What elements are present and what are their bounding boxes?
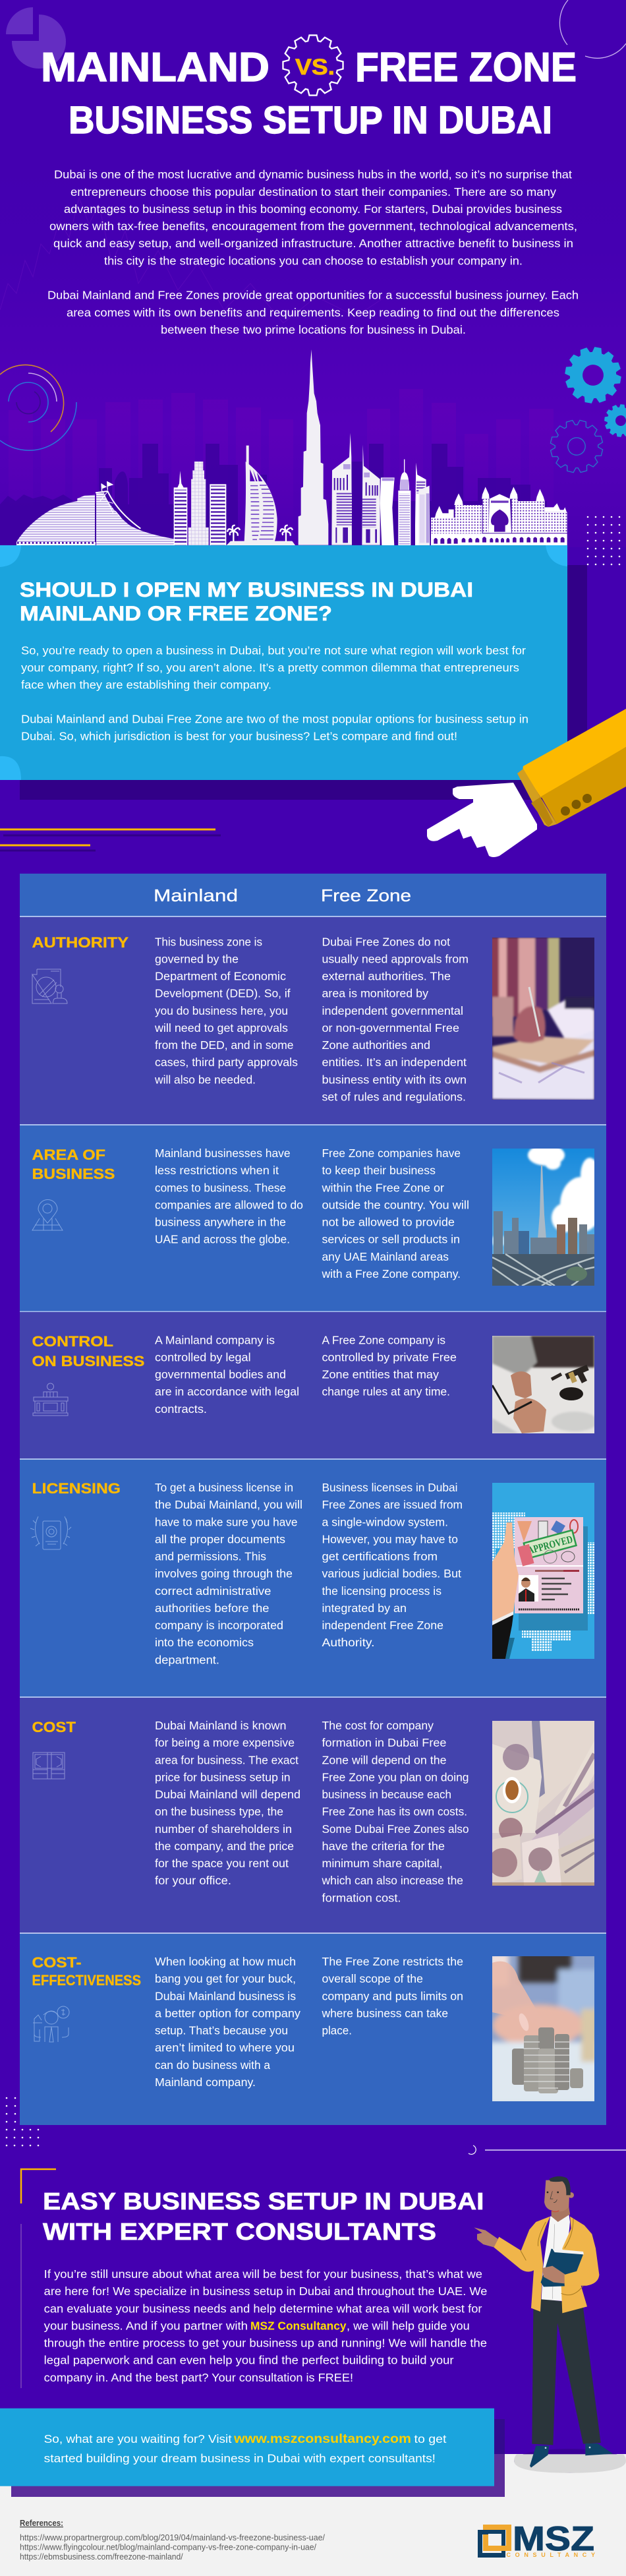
mainland text: Development (DED). So, if [155,987,291,1000]
text block: consultants: your business. And if you partner with [44,2320,248,2333]
free zone text: where business can take [321,2006,448,2020]
free zone text: Free Zone companies have [322,1147,461,1160]
illustration: pointing hand with yellow sleeve [427,709,626,857]
logo: MSZ Consultancy [478,2520,595,2558]
free zone text: not be allowed to provide [322,1216,455,1229]
hero background gradient [0,152,626,547]
mainland text: comes to business. These [155,1181,286,1194]
row: area of business [20,1125,606,1312]
mainland text: a better option for company [155,2006,300,2020]
row heading [32,1147,115,1182]
icon: outlined gear [545,415,608,478]
heading: easy business setup: EASY BUSINESS SETUP IN DUBAI [43,2188,484,2215]
row heading: COST [32,1719,76,1735]
call-to-action shadow [11,2419,505,2497]
mainland text [155,1333,299,1416]
heading: SHOULD I OPEN MY BUSINESS IN DUBAI [20,578,473,601]
row heading: AUTHORITY [32,934,128,951]
photo: hand writing over charts [492,938,594,1100]
text block: consultants: , we will help guide you [347,2320,470,2333]
icon: certificate with laurel [30,1516,71,1549]
text block: Dubai Mainland and Dubai Free Zone are two of the most popular options for business setup in [21,713,528,726]
mainland text: the Dubai Mainland, you will [155,1498,302,1511]
mainland text: department. [155,1653,219,1666]
mainland text: will need to get approvals [154,1021,288,1034]
photo: gavel and hands [492,1336,594,1433]
free zone text: which can also increase the [321,1874,463,1887]
text block: So, you’re ready to open a business in Dubai, but you’re not sure what region will work best for [21,644,526,657]
free zone text: have the criteria for the [322,1840,445,1853]
free zone text: independent governmental [322,1004,463,1017]
table header: Free Zone [321,885,411,905]
illustration: consultant pointing [474,2176,626,2473]
mainland text: number of shareholders in [155,1822,292,1836]
icon: government building [33,1383,68,1416]
mainland text: controlled by legal [155,1350,251,1363]
mainland text: When looking at how much [155,1955,296,1968]
mainland text: companies are allowed to do [155,1198,303,1211]
call-to-action panel: started building your dream business in Dubai with expert consultants! [44,2451,436,2465]
icon: vs gear badge [283,35,343,96]
mainland text: business anywhere in the [155,1216,286,1229]
mainland text: and permissions. This [155,1549,266,1563]
mainland text: This business zone is [155,935,262,948]
references: https://www.propartnergroup.com/blog/2019/04/mainland-vs-freezone-business-uae/ [20,2533,325,2542]
mainland text: Dubai Mainland will depend [155,1788,300,1801]
icon: blue gear large [561,343,625,407]
intro text: between these two prime locations for business in Dubai. [161,323,466,336]
free zone text: within the Free Zone or [321,1181,444,1194]
intro text: quick and easy setup, and well-organized infrastructure. Another attractive benefit to business in [53,237,573,250]
row: cost [20,1698,606,1934]
free zone text: minimum share capital, [322,1857,443,1870]
footer gray background [0,2454,626,2576]
mainland text: the company, and the price [155,1840,294,1853]
free zone text: various judicial bodies. But [322,1567,461,1580]
free zone text: any UAE Mainland areas [322,1250,449,1263]
icon: banknotes [33,1752,65,1779]
row heading: EFFECTIVENESS [32,1972,141,1989]
call-to-action panel: www.mszconsultancy.com [233,2432,411,2446]
free zone text: controlled by private Free [322,1350,457,1363]
free zone text: business in because each [322,1788,451,1801]
panel: should I open my business [0,545,567,780]
mainland text: UAE and across the globe. [155,1233,290,1246]
icon: vs gear badge: VS. [295,55,335,80]
mainland text [155,1719,300,1887]
free zone text: usually need approvals from [322,952,469,965]
icon: investor with dollar bubble [33,2006,69,2042]
free zone text: Free Zone has its own costs. [322,1805,467,1818]
mainland text: cases, third party approvals [155,1056,298,1069]
row: authority [20,917,606,1125]
title: MAINLAND [41,45,270,90]
mainland text: To get a business license in [155,1481,293,1494]
intro text: area comes with its own benefits and requirements. Keep reading to find out the differences [67,306,559,319]
free zone text: integrated by an [322,1602,407,1615]
row: licensing [20,1460,606,1698]
mainland text: you do business here, you [155,1004,288,1017]
text block: Dubai. So, which jurisdiction is best for your business? Let’s compare and find out! [21,730,457,743]
mainland text: are in accordance with legal [155,1385,299,1398]
free zone text: outside the country. You will [322,1198,469,1211]
free zone text: Zone will depend on the [322,1753,447,1766]
free zone text: Free Zone you plan on doing [322,1770,469,1783]
free zone text: overall scope of the [322,1972,423,1985]
mainland text: Dubai Mainland is known [155,1719,286,1732]
free zone text: to keep their business [322,1164,436,1177]
intro text: this city is the strategic locations you can choose to establish your company in. [104,254,523,267]
free zone text [321,1719,469,1904]
decorative arc and line [469,2145,626,2154]
free zone text [322,935,469,1104]
free zone text: services or sell products in [322,1233,460,1246]
free zone text: formation in Dubai Free [322,1736,447,1749]
head [544,2176,574,2222]
references: https://www.flyingcolour.net/blog/mainland-company-vs-free-zone-company-in-uae/ [20,2543,316,2552]
dot pattern left [6,2097,39,2146]
free zone text: Some Dubai Free Zones also [322,1822,469,1836]
decorative lines [0,828,221,852]
free zone text: Authority. [322,1636,374,1649]
text block: consultants: can evaluate your business needs and help determine what area will work best for [44,2302,482,2315]
mainland text: all the proper documents [155,1532,285,1545]
decorative pie chart [6,7,66,69]
mainland text: less restrictions when it [155,1164,279,1177]
free zone text [321,1955,463,2037]
row heading: LICENSING [32,1480,121,1497]
mainland text: can do business with a [155,2058,270,2072]
free zone text: with a Free Zone company. [321,1267,461,1280]
free zone text: or non-governmental Free [322,1021,459,1034]
row heading: COST- [32,1954,82,1971]
mainland text: Dubai Mainland business is [155,1989,296,2002]
row heading [32,1333,145,1369]
mainland text: A Mainland company is [155,1333,275,1346]
free zone text: Zone entities that may [322,1368,439,1381]
title: BUSINESS SETUP IN DUBAI [69,99,552,142]
mainland text: for being a more expensive [155,1736,295,1749]
photo: coin stacks [492,1956,594,2101]
references [20,2519,325,2561]
mainland text: contracts. [155,1402,207,1416]
intro text: advantages to business setup in this booming economy. For starters, Dubai provides business [64,202,562,216]
free zone text: get certifications from [322,1549,438,1563]
free zone text: Zone authorities and [322,1038,430,1052]
call-to-action panel: So, what are you waiting for? Visit [44,2432,232,2445]
decorative arcs left [0,365,76,450]
free zone text: area is monitored by [322,987,428,1000]
free zone text: A Free Zone company is [322,1333,445,1346]
intro text: entrepreneurs choose this popular destination to start their companies. There are so many [71,185,556,198]
mainland text: governed by the [155,952,239,965]
bracket frame [21,2169,56,2388]
free zone text: The Free Zone restricts the [322,1955,463,1968]
mainland text: involves going through the [155,1567,293,1580]
intro text: owners with tax-free benefits, encouragement from the government, technological advancements, [49,220,577,233]
free zone text: a single-window system. [322,1515,448,1528]
text block [21,644,528,743]
ground shadow [514,2449,626,2473]
free zone text: Dubai Free Zones do not [322,935,450,948]
row heading: ON BUSINESS [32,1353,145,1369]
mainland text: price for business setup in [155,1770,291,1783]
text block: face when they are establishing their company. [21,678,271,691]
photo: passport approved [492,1483,594,1659]
table header [20,874,606,917]
free zone text: change rules at any time. [322,1385,450,1398]
free zone text: business entity with its own [322,1073,467,1086]
heading [20,578,473,625]
decorative line chart [0,198,395,323]
free zone text: The cost for company [322,1719,434,1732]
free zone text [322,1481,463,1649]
heading: easy business setup: WITH EXPERT CONSULTANTS [43,2218,436,2245]
free zone text: independent Free Zone [322,1619,443,1632]
photo: Dubai skyline with highways [492,1149,594,1286]
references: https://ebmsbusiness.com/freezone-mainland/ [20,2552,183,2561]
text block: consultants: through the entire process to get your business up and running! We will handle the [44,2337,487,2350]
mainland text: Mainland company. [155,2076,256,2089]
intro text: Dubai is one of the most lucrative and dynamic business hubs in the world, so it’s no surprise that [54,168,572,181]
mainland text: will also be needed. [154,1073,256,1086]
photo: dirham banknotes [492,1721,594,1886]
mainland text: have to make sure you have [155,1515,298,1528]
mainland text: authorities before the [155,1602,269,1615]
title: FREE ZONE [355,45,577,90]
row: cost-effectiveness [20,1934,606,2125]
references: References: [20,2519,63,2528]
mainland text: Department of Economic [155,970,286,983]
free zone text: set of rules and regulations. [322,1091,466,1104]
free zone text [322,1333,457,1398]
free zone text: external authorities. The [322,970,451,983]
row heading: AREA OF [32,1147,105,1163]
mainland text: correct administrative [155,1584,271,1598]
text block: your company, right? If so, you aren’t alone. It’s a pretty common dilemma that entrepreneurs [21,661,519,674]
dot pattern right [587,516,620,565]
free zone text: place. [322,2024,352,2037]
mainland text: from the DED, and in some [155,1038,294,1052]
mainland text: for your office. [155,1874,231,1887]
free zone text: formation cost. [322,1891,401,1904]
table header: Mainland [154,885,238,905]
text block: consultants: company in. And the best part? Your consultation is FREE! [44,2371,353,2384]
row heading: BUSINESS [32,1166,115,1182]
logo: MSZ Consultancy: MSZ [513,2520,594,2558]
text block: consultants: MSZ Consultancy [250,2320,347,2333]
photo: passport approved: APPROVED [526,1534,574,1557]
mainland text: on the business type, the [155,1805,283,1818]
intro text: Dubai Mainland and Free Zones provide great opportunities for a successful business journey. Each [47,289,579,302]
text block: consultants [44,2267,487,2384]
free zone text: the licensing process is [322,1584,441,1598]
free zone text: entities. It’s an independent [322,1056,467,1069]
free zone text: Free Zones are issued from [322,1498,463,1511]
free zone text: However, you may have to [322,1532,458,1545]
row: control on business [20,1312,606,1460]
free zone text [321,1147,469,1280]
text block: consultants: are here for! We specialize in business setup in Dubai and throughout the UAE. We [44,2285,487,2298]
mainland text: bang you get for your buck, [155,1972,296,1985]
logo: MSZ Consultancy: CONSULTANCY [506,2552,595,2558]
comparison table [20,874,606,2125]
text block: consultants: If you’re still unsure about what area will be best for your business, that’s what we [44,2267,482,2281]
illustration: Dubai skyline west [16,446,295,545]
icon: document with stamp [32,969,67,1003]
illustration: Dubai skyline east [299,349,567,545]
background dark skyline silhouette [0,444,547,546]
free zone text: Business licenses in Dubai [322,1481,457,1494]
icon: blue gear small [603,403,626,438]
mainland text [154,935,298,1086]
mainland text: for the space you rent out [155,1857,289,1870]
text block: consultants: legal paperwork and can even help you find the perfect building to build your [44,2354,454,2367]
intro text [47,168,579,336]
call-to-action panel: to get [414,2432,447,2445]
mainland text: governmental bodies and [155,1368,286,1381]
call-to-action panel [0,2409,494,2486]
mainland text: aren’t limited to where you [155,2041,295,2054]
decorative top-right arcs [559,0,626,58]
heading: MAINLAND OR FREE ZONE? [20,601,332,625]
mainland text: into the economics [155,1636,254,1649]
mainland text: company is incorporated [155,1619,283,1632]
mainland text: Mainland businesses have [155,1147,291,1160]
row heading: CONTROL [32,1333,113,1350]
free zone text: company and puts limits on [322,1989,463,2002]
title [41,35,577,142]
heading: easy business setup [43,2188,484,2245]
mainland text [155,1147,303,1246]
mainland text: area for business. The exact [155,1753,299,1766]
row heading [32,1954,141,1989]
mainland text [155,1481,302,1666]
icon: map pin [32,1200,63,1230]
background city bars [9,389,554,549]
mainland text [155,1955,300,2089]
mainland text: setup. That’s because you [155,2024,288,2037]
panel shadow: question section [20,565,587,800]
